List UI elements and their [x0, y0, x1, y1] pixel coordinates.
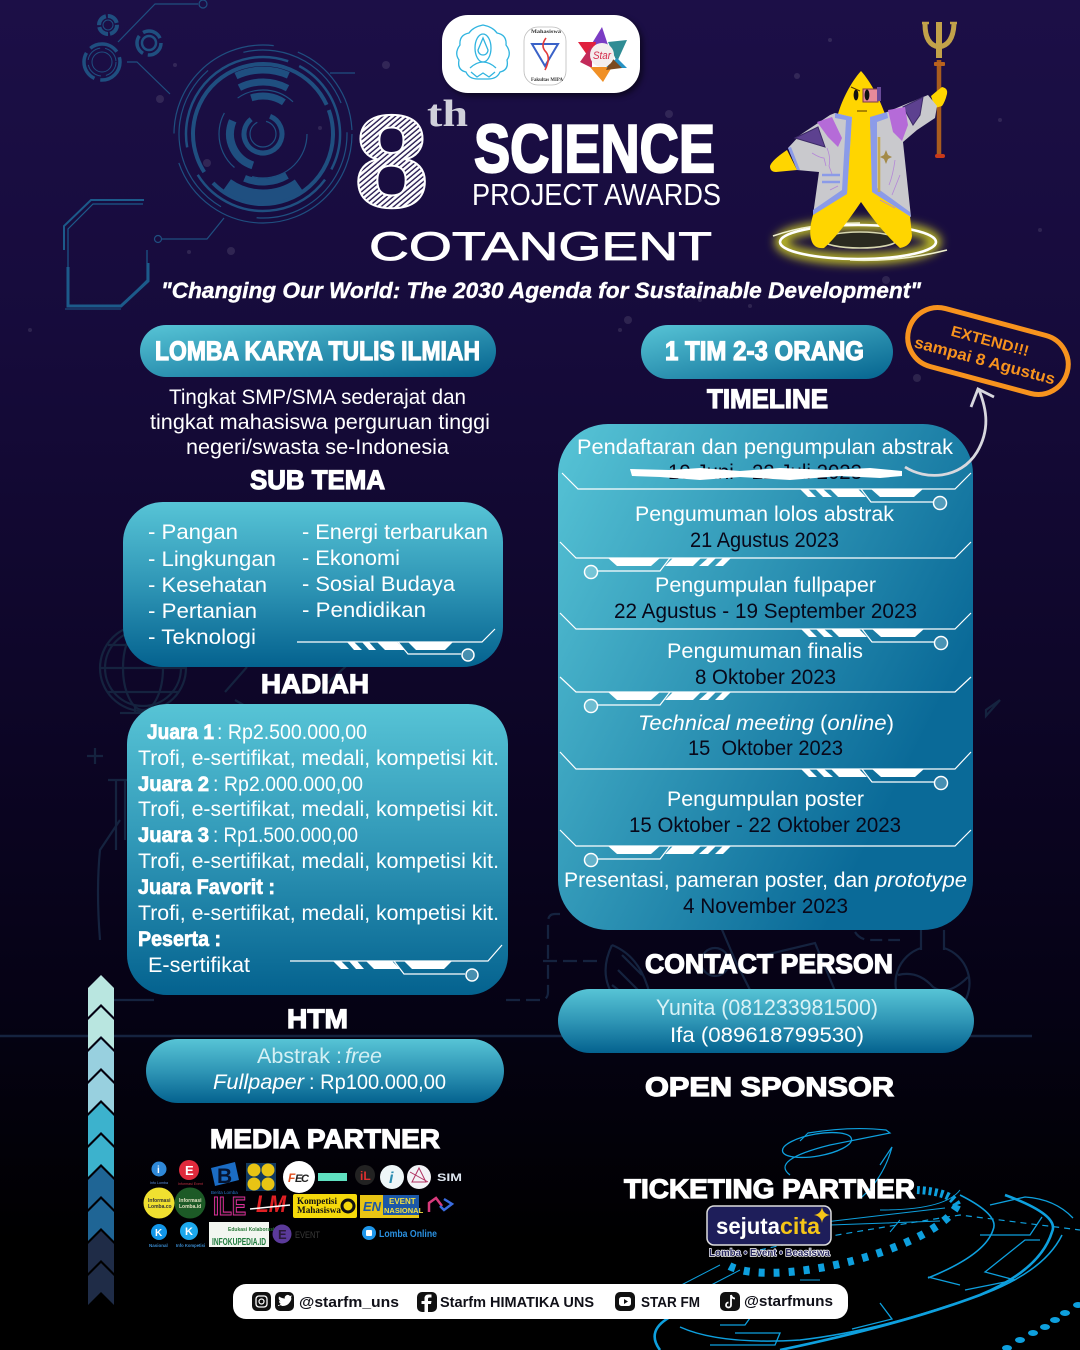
logo: infokupedia: Edukasi Kolaborasi [228, 1227, 275, 1233]
logo: informasi lomba green: Lomba.id [179, 1204, 201, 1210]
text: participants: tingkat mahasiswa perguruan tinggi [150, 411, 490, 434]
panel: sub tema: - Energi terbarukan [302, 521, 488, 544]
logo: berita lomba [211, 1162, 239, 1195]
coat left [788, 113, 852, 215]
step: pengumuman lolos abstrak: Pengumuman lolos abstrak [635, 503, 894, 526]
background: faint science line art [87, 625, 1000, 1020]
logo: k nasional [149, 1224, 168, 1248]
logo: teal bar [318, 1173, 347, 1181]
media partner logos [144, 1160, 462, 1248]
shoulder pads dark [795, 97, 923, 147]
logo: lomba online [362, 1226, 437, 1240]
lapel right [870, 112, 911, 217]
left hand [770, 150, 797, 172]
title: COTANGENT: COTANGENT [369, 225, 712, 269]
logo: informasi lomba green: Informasi [179, 1198, 202, 1204]
logo: event purple [272, 1224, 320, 1244]
logo: info lomba black [355, 1165, 375, 1185]
text: participants: negeri/swasta se-Indonesia [186, 436, 449, 459]
heading: open sponsor: OPEN SPONSOR [645, 1072, 894, 1102]
logo: k nasional: K [155, 1228, 163, 1239]
logo: himpunan badge: Mahasiswa [531, 30, 562, 35]
panel: hadiah: Trofi, e-sertifikat, medali, kompetisi kit. [138, 902, 499, 925]
logo: circle i [380, 1165, 404, 1189]
logo: berita lomba: Berita Lomba [211, 1190, 238, 1195]
mascot [770, 22, 957, 260]
logo: himpunan badge: Fakultas MIPA [531, 78, 563, 83]
pill: contact person: Yunita (081233981500) [656, 995, 878, 1020]
step: pengumpulan fullpaper: 22 Agustus - 19 September 2023 [614, 600, 917, 623]
text: participants: Tingkat SMP/SMA sederajat dan [169, 386, 466, 409]
panel: hadiah: Juara 3 [138, 824, 209, 847]
text: participants [150, 386, 490, 459]
logo: circle triangle [407, 1165, 431, 1189]
logo: event purple: E [278, 1227, 287, 1242]
step: presentasi: prototype [874, 869, 967, 892]
logo: star fm colourful star [578, 27, 627, 82]
panel: sub tema: - Sosial Budaya [302, 573, 455, 596]
panel: hadiah: Peserta : [138, 928, 221, 951]
badge [878, 137, 880, 192]
logo: info lomba: i [157, 1165, 160, 1176]
step: technical meeting: (online) [820, 712, 894, 735]
lapel left [813, 113, 852, 215]
panel: hadiah: Trofi, e-sertifikat, medali, kompetisi kit. [138, 798, 499, 821]
shoulder pads light [817, 107, 908, 147]
logo: k nasional: Nasional [149, 1243, 168, 1248]
icon: facebook [417, 1292, 437, 1312]
logo: kompetisi mahasiswa [293, 1194, 357, 1218]
pocket [822, 175, 840, 182]
panel: hadiah [127, 704, 508, 995]
heading: sub tema: SUB TEMA [250, 465, 385, 495]
pill: htm: : Rp100.000,00 [309, 1071, 446, 1094]
tagline: "Changing Our World: The 2030 Agenda for Sustainable Development" [161, 278, 922, 303]
social media bar [233, 1284, 848, 1319]
step: pengumpulan poster [629, 788, 901, 837]
icon: tiktok [720, 1292, 740, 1311]
step: technical meeting [638, 712, 894, 760]
circuit traces [812, 148, 900, 208]
logo: infokupedia: INFOKUPEDIA.ID [212, 1237, 266, 1248]
logo: circle i: i [389, 1170, 394, 1187]
title: th: th [427, 93, 468, 135]
logo: informasi lomba yellow: Informasi [148, 1198, 171, 1204]
step: pengumuman finalis [667, 640, 863, 689]
step: presentasi: 4 November 2023 [683, 895, 848, 918]
background: blue dot chain [1002, 1302, 1080, 1350]
title: PROJECT AWARDS: PROJECT AWARDS [472, 177, 721, 212]
badge: extend: sampai 8 Agustus [912, 334, 1057, 388]
logo: infokupedia [209, 1222, 275, 1248]
organizer logos pill [442, 15, 643, 96]
panel: sub tema: - Pangan [148, 521, 238, 544]
step: pengumpulan fullpaper [614, 574, 917, 623]
logo: info lomba: Info Lomba [150, 1181, 168, 1185]
logo: informasi event: Informasi Event [178, 1182, 203, 1186]
logo: kompetisi mahasiswa: Mahasiswa [297, 1206, 341, 1216]
logo: event nasional: NASIONAL [384, 1206, 424, 1215]
text: facebook handle: Starfm HIMATIKA UNS [440, 1294, 594, 1311]
panel: hadiah: E-sertifikat [148, 954, 250, 977]
text: twitter and instagram handle: @starfm_uns [299, 1294, 399, 1311]
logo: kompetisi mahasiswa: Kompetisi [297, 1197, 337, 1207]
step: pengumuman finalis: 8 Oktober 2023 [695, 666, 836, 689]
logo: fec: EC [295, 1173, 310, 1185]
staff [937, 60, 941, 155]
heading: timeline: TIMELINE [707, 384, 828, 414]
pill: contact person [558, 989, 974, 1053]
badge: extend: EXTEND!!! [949, 323, 1031, 360]
logo: informasi event [178, 1160, 203, 1186]
panel: sub tema [123, 502, 503, 667]
logo: berita lomba: B [217, 1165, 232, 1188]
logo: himpunan badge [524, 27, 566, 85]
step: pengumuman lolos abstrak [635, 503, 894, 552]
pill: htm [146, 1039, 504, 1103]
icon: twitter [275, 1292, 294, 1311]
pill: htm: Fullpaper [213, 1071, 305, 1094]
panel: sub tema: - Pertanian [148, 600, 257, 623]
panel: hadiah: Trofi, e-sertifikat, medali, kompetisi kit. [138, 747, 499, 770]
logo: info lomba black: iL [360, 1169, 371, 1183]
logo: event nasional: EN [363, 1199, 382, 1214]
pill: team size [641, 325, 893, 379]
pill: htm: Abstrak : [257, 1045, 342, 1068]
step: pengumuman lolos abstrak: 21 Agustus 2023 [690, 529, 839, 552]
step: presentasi [564, 869, 967, 918]
trident [922, 22, 957, 58]
head details [851, 87, 881, 111]
panel: sub tema: - Pendidikan [302, 599, 426, 622]
panel: hadiah: Juara 1 [147, 721, 214, 744]
step: pengumpulan fullpaper: Pengumpulan fullpaper [655, 574, 876, 597]
heading: contact person: CONTACT PERSON [645, 949, 893, 979]
logo: lomba online: Lomba Online [379, 1229, 437, 1240]
pill: lomba karya tulis ilmiah [140, 325, 496, 377]
logo: university emblem [457, 25, 509, 79]
heading: htm: HTM [287, 1004, 348, 1034]
pill: lomba karya tulis ilmiah: LOMBA KARYA TULIS ILMIAH [155, 336, 480, 366]
panel: hadiah: : Rp2.000.000,00 [213, 773, 363, 796]
step: technical meeting: Technical meeting [638, 712, 814, 735]
step: pendaftaran: 19 Juni - 22 Juli 2023 [668, 461, 862, 484]
glowing rings [773, 223, 947, 260]
yellow body [810, 71, 912, 248]
panel: hadiah: Trofi, e-sertifikat, medali, kompetisi kit. [138, 850, 499, 873]
title: hatched 8: 8 [354, 88, 429, 235]
logo: lm: LM [256, 1191, 287, 1218]
step: pendaftaran: Pendaftaran dan pengumpulan abstrak [577, 436, 954, 459]
pill: team size: 1 TIM 2-3 ORANG [665, 336, 864, 366]
logo: info lomba [150, 1162, 168, 1185]
panel: hadiah: Juara Favorit : [138, 876, 275, 899]
logo: fec [283, 1161, 315, 1193]
step: pengumuman finalis: Pengumuman finalis [667, 640, 863, 663]
text: youtube handle: STAR FM [641, 1294, 700, 1311]
logo: info kompetisi: Info Kompetisi [176, 1243, 205, 1248]
logo: info kompetisi: K [185, 1226, 193, 1238]
icon: instagram [252, 1292, 271, 1311]
logo: ile: ILE [213, 1191, 246, 1221]
logo: informasi lomba yellow: Lomba.co [148, 1204, 172, 1210]
background: star dots [28, 38, 1042, 382]
logo: event nasional: EVENT [389, 1197, 416, 1206]
logo: event nasional [360, 1195, 424, 1218]
chevron strip [88, 975, 114, 1305]
panel: sub tema: - Lingkungan [148, 548, 276, 571]
logo: event purple: EVENT [295, 1230, 320, 1240]
panel: sub tema: - Kesehatan [148, 574, 267, 597]
logo: sejutacita [707, 1206, 831, 1259]
heading: media partner: MEDIA PARTNER [210, 1124, 440, 1154]
right hand [931, 87, 947, 108]
text: tiktok handle: @starfmuns [744, 1293, 833, 1310]
panel: sub tema: - Ekonomi [302, 547, 400, 570]
background: octagon frame [64, 200, 148, 309]
badge: extend [901, 301, 1075, 401]
step: presentasi: Presentasi, pameran poster, dan [564, 869, 869, 892]
heading: hadiah: HADIAH [261, 669, 369, 699]
panel: hadiah: : Rp2.500.000,00 [217, 721, 367, 744]
arrow: hand-drawn to badge [905, 389, 994, 475]
coat right [870, 95, 937, 217]
step: pengumpulan poster: 15 Oktober - 22 Oktober 2023 [629, 814, 901, 837]
panel: timeline [558, 424, 973, 930]
logo: informasi lomba yellow [144, 1188, 174, 1218]
logo: fec: F [288, 1171, 296, 1185]
panel: sub tema: - Teknologi [148, 626, 256, 649]
logo: star fm colourful star: Star [593, 50, 612, 62]
panel: hadiah: : Rp1.500.000,00 [213, 824, 358, 847]
logo: sejutacita: Lomba • Event • Beasiswa [709, 1247, 830, 1259]
background: circular HUD [84, 0, 378, 249]
logo: info kompetisi [176, 1222, 205, 1248]
title: SCIENCE: SCIENCE [474, 111, 715, 187]
logo: sejutacita: sejuta [716, 1213, 780, 1239]
background: horizontal rule [0, 1035, 1032, 1037]
step: pengumpulan poster: Pengumpulan poster [667, 788, 864, 811]
step: technical meeting: 15 Oktober 2023 [688, 737, 843, 760]
panel: hadiah: Juara 2 [138, 773, 209, 796]
logo: me [429, 1198, 452, 1212]
logo: event yellow dots [246, 1163, 276, 1191]
logo: informasi event: E [185, 1163, 194, 1178]
logo: sejutacita: cita [780, 1213, 820, 1239]
heading: ticketing partner: TICKETING PARTNER [624, 1174, 915, 1204]
logo: sim: SIM [437, 1172, 462, 1184]
pill: htm: free [345, 1045, 382, 1068]
background: blue HUD rings bottom right [655, 1128, 1080, 1350]
pill: contact person: Ifa (089618799530) [670, 1024, 864, 1047]
icon: youtube [615, 1292, 635, 1311]
step: pendaftaran [577, 436, 954, 484]
cuff left [788, 147, 800, 170]
logo: informasi lomba green [174, 1188, 206, 1218]
